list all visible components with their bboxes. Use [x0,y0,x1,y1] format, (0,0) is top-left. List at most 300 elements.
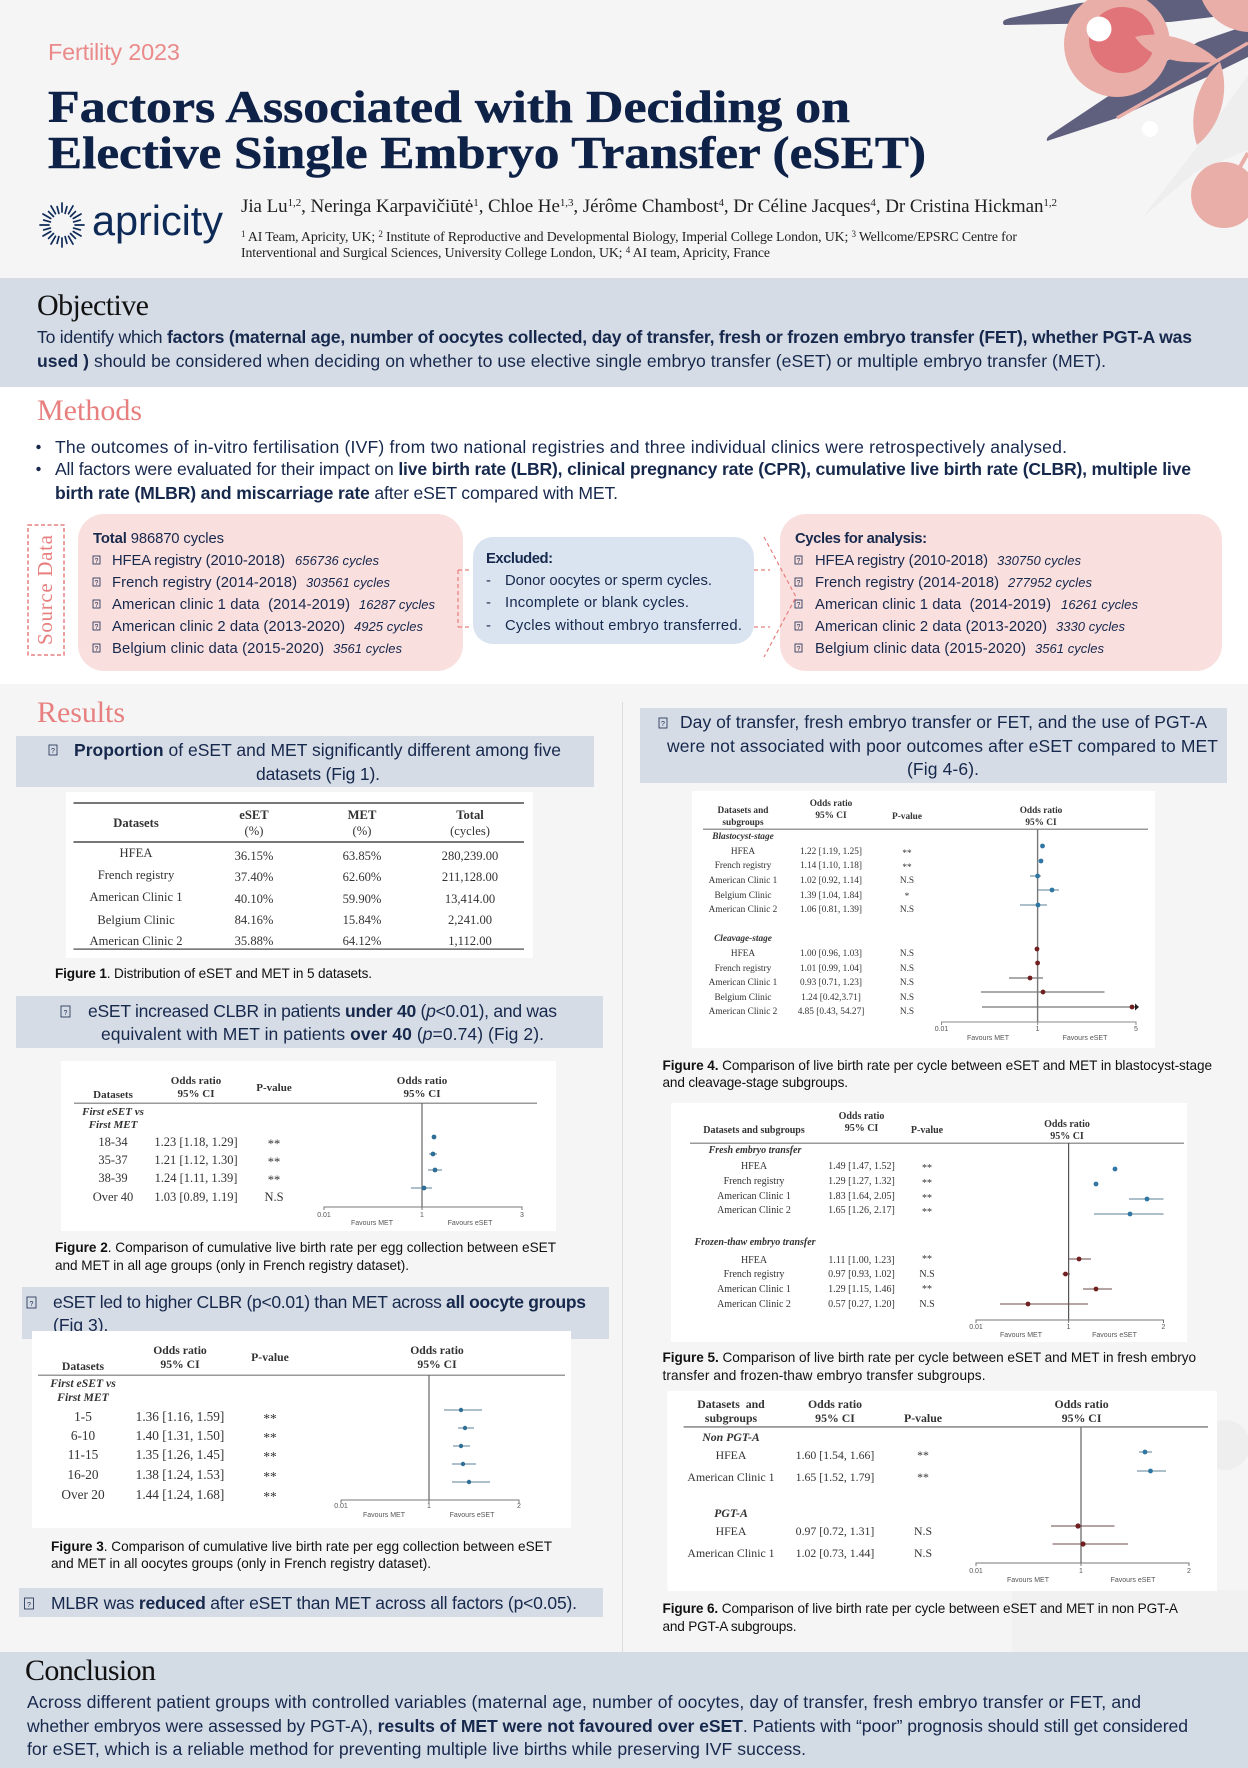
panel: methods [36,394,1191,503]
panel: cycles for analysis: ? [797,646,801,653]
figure 4 table: American Clinic 2 [709,1007,778,1017]
caption: figure 2 [55,1240,556,1273]
panel: cycles for analysis: ? [797,580,801,587]
connector: dashed bracket to excluded box [458,570,472,627]
panel: cycles for analysis: 330750 cycles [997,553,1082,568]
figure 6 chart: 0.01 [969,1568,983,1575]
figure 2 table: Datasets [93,1089,134,1101]
figure 3 table: 6-10 [71,1428,96,1443]
methods bullet list: The outcomes of in-vitro fertilisation (IVF) from two national registries and three individual clinics were retrospectively analysed. [55,437,1067,457]
caption: figure 5: transfer and frozen-thaw embryo transfer subgroups. [662,1368,986,1383]
key finding 4 [19,1588,603,1617]
figure 6 chart: 1 [1079,1568,1083,1575]
caption: figure 1: Figure 1. Distribution of eSET and MET in 5 datasets. [55,966,372,981]
figure 3 chart: 1 [427,1503,431,1510]
figure 5 table: 1.49 [1.47, 1.52] [828,1161,895,1172]
figure 4 table: 0.93 [0.71, 1.23] [800,978,862,988]
figure 1: distribution table: Belgium Clinic [97,913,175,927]
figure 3 table: 1.38 [1.24, 1.53] [136,1467,224,1482]
methods bullet list [36,437,1191,503]
figure 2 chart: 0.01 [317,1212,331,1219]
figure 2 table: N.S [264,1190,284,1204]
figure 4 table: Belgium Clinic [714,993,772,1003]
figure 1: distribution table: Datasets [113,816,159,830]
figure 6 table: 0.97 [0.72, 1.31] [796,1524,874,1538]
panel: total cycles: 656736 cycles [295,553,380,568]
figure 4 table: N.S [900,949,914,959]
figure 1: distribution table: 64.12% [343,934,382,948]
panel: excluded: - [486,618,491,634]
panel: excluded: Incomplete or blank cycles. [505,595,689,611]
key finding 5: were not associated with poor outcomes after eSET compared to MET [666,736,1218,756]
figure 6 table: 1.02 [0.73, 1.44] [796,1546,874,1560]
heading: methods: Methods [37,394,142,427]
figure 6 chart [969,1427,1191,1584]
key finding 1: ? [51,748,55,755]
source data label [28,525,64,655]
caption: figure 6 [662,1601,1179,1634]
figure 2 table: 1.03 [0.89, 1.19] [154,1190,238,1204]
figure 6 table: ** [917,1470,929,1484]
figure 2 table: First eSET vs [81,1106,144,1118]
figure 3 table: Datasets [62,1360,105,1373]
figure 4: forest plot by embryo stage [692,791,1155,1048]
caption: figure 2: and MET in all age groups (only in French registry dataset). [55,1258,409,1273]
figure 6 table: P-value [904,1411,942,1425]
figure 6 table: 95% CI [815,1411,855,1425]
figure 1: distribution table: American Clinic 1 [89,890,183,904]
figure 4 table: Odds ratio [1020,806,1063,816]
figure 1: distribution table: (cycles) [450,824,490,838]
figure 1: distribution table: 40.10% [235,892,274,906]
panel: excluded: Donor oocytes or sperm cycles. [505,573,712,589]
figure 4 table: P-value [892,812,922,822]
figure 6 table: Odds ratio [1055,1397,1109,1411]
figure 6 table: N.S [914,1524,932,1538]
caption: figure 3 [51,1539,552,1571]
caption: figure 5: Figure 5. Comparison of live birth rate per cycle between eSET and MET in fresh embryo [662,1350,1196,1365]
panel: cycles for analysis: 3561 cycles [1035,641,1104,656]
figure 1: distribution table: 35.88% [235,934,274,948]
panel: excluded [473,537,754,644]
figure 4 chart [935,829,1139,1042]
figure 3 table: 1.36 [1.16, 1.59] [136,1409,224,1424]
figure 4 table: ** [902,849,912,859]
figure 6 table: HFEA [716,1524,747,1538]
authors: , Chloe He [479,196,560,217]
panel: cycles for analysis: ? [797,602,801,609]
panel: cycles for analysis: 277952 cycles [1007,575,1092,590]
panel: cycles for analysis: ? [797,558,801,565]
figure 3 table: 1.40 [1.31, 1.50] [136,1428,224,1443]
figure 4 table: N.S [900,905,914,915]
figure 2 table: Odds ratio [397,1075,448,1087]
figure 5 chart: Favours MET [1000,1332,1043,1339]
figure 2 table: 95% CI [178,1088,214,1100]
key finding 5: (Fig 4-6). [907,759,979,779]
panel: total cycles [78,514,463,671]
figure 5 table: 1.83 [1.64, 2.05] [828,1191,895,1202]
figure 1: distribution table: 36.15% [235,849,274,863]
figure 6 chart: Favours MET [1007,1577,1050,1584]
objective text [37,327,1192,371]
figure 2 chart: 1 [420,1212,424,1219]
figure 3 chart: 2 [517,1503,521,1510]
key finding 3: (Fig 3). [53,1315,108,1335]
heading: results: Results [37,696,125,729]
figure 4 table: 1.01 [0.99, 1.04] [800,964,862,974]
panel: cycles for analysis: Cycles for analysis: [795,531,927,547]
figure 2 chart: Favours MET [351,1220,394,1227]
figure 5 table: 1.29 [1.15, 1.46] [828,1284,895,1295]
caption: figure 3: Figure 3. Comparison of cumulative live birth rate per egg collection between eSET [51,1539,552,1554]
figure 6 table: subgroups [705,1411,758,1425]
affiliations: 3 [851,229,856,239]
key finding 5: ? [661,721,665,728]
figure 5 table: N.S [919,1299,935,1310]
conclusion text [26,1692,1188,1759]
figure 3 table: 1.44 [1.24, 1.68] [136,1487,224,1502]
figure 5 table: Odds ratio [839,1111,884,1122]
figure 5 table: American Clinic 1 [717,1191,791,1202]
key finding 3: ? [30,1301,34,1308]
figure 4 table: 1.14 [1.10, 1.18] [800,861,862,871]
figure 5 table: ** [922,1207,932,1218]
key finding 2: eSET increased CLBR in patients under 40 (p<0.01), and was [88,1001,557,1021]
figure 4 table: American Clinic 1 [709,876,778,886]
figure 1: distribution table: 2,241.00 [448,913,492,927]
figure 5 table: ** [922,1163,932,1174]
figure 5 table: 0.97 [0.93, 1.02] [828,1269,895,1280]
panel: total cycles: HFEA registry (2010-2018) [112,553,285,569]
panel: excluded: - [486,573,491,589]
figure 4 table: N.S [900,978,914,988]
source data label: Source Data [33,534,57,645]
figure 6 table: 1.60 [1.54, 1.66] [796,1448,874,1462]
figure 4 chart: Favours MET [967,1035,1010,1042]
figure 2 table: ** [268,1173,280,1187]
figure 6: forest plot by PGT-A use [668,1391,1217,1591]
figure 4 table: 95% CI [815,811,847,821]
figure 4 chart: 5 [1134,1026,1138,1033]
key finding 2 [16,996,603,1048]
figure 5 table: 1.65 [1.26, 2.17] [828,1205,895,1216]
objective text: To identify which factors (maternal age, number of oocytes collected, day of transfer, fresh or frozen embryo transfer (FET), whether PGT-A was [37,327,1192,347]
figure 1: distribution table: 13,414.00 [445,892,495,906]
figure 5 table: American Clinic 2 [717,1299,791,1310]
affiliations: 2 [378,229,383,239]
figure 1: distribution table: eSET [239,808,269,822]
figure 2: forest plot by age [61,1061,556,1231]
figure 3 table: ** [263,1449,277,1464]
figure 3: forest plot by oocyte group [32,1331,571,1528]
affiliations: 4 [626,245,631,255]
authors: , Jérôme Chambost [573,196,719,217]
figure 6 table: Datasets and [697,1397,765,1411]
figure 2 table: Odds ratio [171,1075,222,1087]
panel: total cycles: 3561 cycles [333,641,402,656]
figure 3 table [49,1344,464,1504]
figure 4 table: American Clinic 1 [709,978,778,988]
authors: 1,2 [288,197,301,209]
conclusion text: Across different patient groups with controlled variables (maternal age, number of oocytes, day of transfer, fresh embryo transfer or FET, and [27,1692,1141,1712]
panel: total cycles: American clinic 1 data (2014-2019) [112,597,350,613]
methods bullet list: All factors were evaluated for their impact on live birth rate (LBR), clinical pregnancy rate (CPR), cumulative live birth rate (CLBR), multiple live [55,459,1191,479]
figure 3 table: 16-20 [67,1467,99,1482]
key finding 3 [22,1287,609,1339]
figure 1: distribution table: MET [348,808,377,822]
figure 3 table: 11-15 [68,1447,99,1462]
figure 3 table: 1.35 [1.26, 1.45] [136,1447,224,1462]
figure 2 table: 1.21 [1.12, 1.30] [154,1153,238,1167]
figure 5 table: 95% CI [1050,1131,1084,1142]
figure 5 table: Datasets and subgroups [703,1125,805,1136]
heading: conclusion: Conclusion [25,1654,156,1687]
key finding 1: Proportion of eSET and MET significantly different among five [74,740,561,760]
figure 6 chart: 2 [1187,1568,1191,1575]
figure 5 table: P-value [911,1125,944,1136]
figure 1: distribution table: 211,128.00 [442,870,498,884]
figure 3 table: 1-5 [74,1409,92,1424]
decorative botanical illustration [1003,0,1248,228]
figure 4 table: 1.24 [0.42,3.71] [801,993,861,1003]
figure 1: distribution table: 63.85% [343,849,382,863]
panel: total cycles: Belgium clinic data (2015-2020) [112,641,324,657]
key finding 2: equivalent with MET in patients over 40 (p=0.74) (Fig 2). [101,1024,544,1044]
figure 1: distribution table: American Clinic 2 [89,934,183,948]
panel: cycles for analysis: American clinic 2 data (2013-2020) [815,619,1047,635]
figure 3 chart: Favours MET [363,1512,406,1519]
figure 4 table: 1.06 [0.81, 1.39] [800,905,862,915]
figure 1: distribution table: 1,112.00 [448,934,492,948]
logo: apricity: apricity [92,197,223,244]
figure 6 table: HFEA [716,1448,747,1462]
authors: 4 [718,197,724,209]
authors: 4 [870,197,876,209]
figure 5 table: ** [922,1193,932,1204]
authors: , Dr Cristina Hickman [876,196,1044,217]
figure 3 table: ** [263,1469,277,1484]
figure 2 table: 1.23 [1.18, 1.29] [154,1135,238,1149]
figure 2 table: 35-37 [98,1153,128,1167]
figure 5 table: Fresh embryo transfer [708,1145,801,1156]
figure 1: distribution table: 37.40% [235,870,274,884]
figure 3 table: Over 20 [61,1487,105,1502]
panel: conclusion [0,1652,1248,1768]
figure 5 table: French registry [724,1269,784,1280]
affiliations: Interventional and Surgical Sciences, University College London, UK; [241,245,623,260]
authors: , Dr Céline Jacques [724,196,871,217]
figure 3 table: Odds ratio [410,1344,464,1357]
methods bullet list: birth rate (MLBR) and miscarriage rate after eSET compared with MET. [55,483,618,503]
authors: 1 [473,197,479,209]
figure 4 table: 1.39 [1.04, 1.84] [800,891,862,901]
figure 5 table: French registry [724,1176,784,1187]
panel: cycles for analysis: Belgium clinic data (2015-2020) [815,641,1026,657]
panel: total cycles: American clinic 2 data (2013-2020) [112,619,345,635]
figure 4 table: 1.00 [0.96, 1.03] [800,949,862,959]
figure 5 table: 1.29 [1.27, 1.32] [828,1176,895,1187]
figure 4 table: N.S [900,993,914,1003]
caption: figure 5 [662,1350,1196,1383]
figure 4 table: 1.02 [0.92, 1.14] [800,876,862,886]
figure 3 table: 95% CI [417,1358,457,1371]
figure 4 table: HFEA [731,949,755,959]
panel: objective [0,278,1248,387]
figure 5 table: N.S [919,1269,935,1280]
figure 5 table: American Clinic 2 [717,1205,791,1216]
figure 2 table [81,1075,448,1204]
figure 2 table: First MET [88,1119,139,1131]
figure 5 chart: 0.01 [969,1324,983,1331]
figure 4 chart: 0.01 [935,1026,948,1033]
figure 5: forest plot by fresh or frozen transfer [671,1103,1187,1342]
affiliations: AI team, Apricity, France [630,245,770,260]
figure 2 table: 18-34 [98,1135,128,1149]
figure 1: distribution table: Total [456,808,484,822]
figure 3 chart: Favours eSET [450,1512,495,1519]
figure 3 table: First MET [56,1391,110,1404]
figure 6 table: 95% CI [1062,1411,1102,1425]
figure 3 table: ** [263,1411,277,1426]
panel: total cycles: ? [95,602,99,609]
authors: 1,2 [1043,197,1057,209]
figure 4 table: Belgium Clinic [714,891,772,901]
affiliations [241,229,1017,260]
figure 1: distribution table: 84.16% [235,913,274,927]
figure 3 table: ** [263,1489,277,1504]
figure 5 table: Frozen-thaw embryo transfer [693,1237,816,1248]
figure 5 table: ** [922,1178,932,1189]
logo: apricity [40,197,223,247]
figure 1: distribution table: 15.84% [343,913,382,927]
panel: total cycles: French registry (2014-2018) [112,575,297,591]
authors: , Neringa Karpavičiūtė [301,196,473,217]
figure 6 table: American Clinic 1 [687,1546,775,1560]
figure 4 table: ** [902,863,912,873]
figure 4 table: Blastocyst-stage [711,832,774,842]
panel: cycles for analysis: ? [797,624,801,631]
figure 3 chart [334,1375,521,1519]
figure 3 table: First eSET vs [49,1377,116,1390]
panel: cycles for analysis [780,514,1222,671]
figure 5 table: HFEA [741,1255,768,1266]
figure 2 table: 95% CI [404,1088,440,1100]
figure 1: distribution table: 59.90% [343,892,382,906]
figure 2 table: 38-39 [98,1171,128,1185]
figure 6 table: American Clinic 1 [687,1470,775,1484]
panel: total cycles: 16287 cycles [359,597,436,612]
figure 6 table: 1.65 [1.52, 1.79] [796,1470,874,1484]
figure 5 chart: Favours eSET [1092,1332,1138,1339]
figure 3 table: 95% CI [160,1358,200,1371]
figure 2 table: 1.24 [1.11, 1.39] [155,1171,237,1185]
figure 6 chart: Favours eSET [1111,1577,1156,1584]
figure 6 table: Odds ratio [808,1397,862,1411]
figure 1: distribution table: (%) [245,824,263,838]
key finding 5: Day of transfer, fresh embryo transfer or FET, and the use of PGT-A [680,712,1207,732]
conclusion text: for eSET, which is a reliable method for preventing multiple live births while preserving IVF success. [27,1739,806,1759]
figure 5 table: 1.11 [1.00, 1.23] [828,1255,895,1266]
panel: total cycles: 4925 cycles [354,619,424,634]
heading: objective: Objective [37,289,149,322]
caption: figure 4: Figure 4. Comparison of live birth rate per cycle between eSET and MET in blastocyst-stage [662,1058,1212,1073]
figure 1: distribution table: 280,239.00 [442,849,498,863]
figure 3 table: Odds ratio [153,1344,207,1357]
figure 5 chart: 2 [1162,1324,1166,1331]
figure 4 table: French registry [715,964,772,974]
figure 2 chart [317,1103,524,1227]
panel: excluded: - [486,595,491,611]
figure 3 table: P-value [251,1351,289,1364]
figure 2 table: P-value [256,1082,292,1094]
figure 4 table: N.S [900,1007,914,1017]
figure 5 table: ** [922,1284,932,1295]
figure 4 table: N.S [900,876,914,886]
caption: figure 4 [662,1058,1212,1090]
caption: figure 6: Figure 6. Comparison of live birth rate per cycle between eSET and MET in non PGT-A [662,1601,1179,1616]
figure 2 table: ** [268,1137,280,1151]
affiliations: 1 [241,229,246,239]
figure 4 table: HFEA [731,847,755,857]
panel: total cycles: Total 986870 cycles [93,531,224,547]
figure 2 table: Over 40 [93,1190,133,1204]
figure 3 chart: 0.01 [334,1503,348,1510]
figure 4 table: 1.22 [1.19, 1.25] [800,847,862,857]
figure 1: distribution table: 62.60% [343,870,382,884]
affiliations: Wellcome/EPSRC Centre for [856,229,1017,244]
panel: total cycles: 303561 cycles [306,575,390,590]
figure 5 chart: 1 [1067,1324,1071,1331]
key finding 5 [640,708,1227,783]
key finding 4: ? [27,1602,31,1609]
figure 4 table [709,799,1063,1017]
figure 2 table: ** [268,1155,280,1169]
title [48,82,926,178]
figure 4 chart: 1 [1036,1026,1040,1033]
figure 4 chart: Favours eSET [1063,1035,1108,1042]
affiliations: Institute of Reproductive and Developmental Biology, Imperial College London, UK; [383,229,852,244]
figure 4 table: subgroups [722,818,764,828]
panel: cycles for analysis: 16261 cycles [1061,597,1138,612]
panel: cycles for analysis: French registry (2014-2018) [815,575,999,591]
figure 6 table [687,1397,1109,1560]
objective text: used ) should be considered when deciding on whether to use elective single embryo transfer (eSET) or multiple embryo transfer (MET). [37,351,1106,371]
figure 2 chart: Favours eSET [448,1220,493,1227]
figure 4 table: Odds ratio [810,799,853,809]
figure 4 table: American Clinic 2 [709,905,778,915]
figure 4 table: * [905,892,910,902]
figure 4 table: Datasets and [718,806,769,816]
caption: figure 3: and MET in all oocytes groups (only in French registry dataset). [51,1556,431,1571]
panel: total cycles: ? [95,580,99,587]
figure 4 table: French registry [715,861,772,871]
key finding 1 [16,736,594,787]
panel: total cycles: ? [95,558,99,565]
figure 6 table: PGT-A [714,1506,748,1520]
panel: cycles for analysis: American clinic 1 data (2014-2019) [815,597,1051,613]
conclusion text: whether embryos were assessed by PGT-A), results of MET were not favoured over eSET. Patients with “poor” prognosis should still get considered [26,1716,1188,1736]
caption: figure 4: and cleavage-stage subgroups. [662,1075,848,1090]
caption: figure 2: Figure 2. Comparison of cumulative live birth rate per egg collection between eSET [55,1240,556,1255]
affiliations: AI Team, Apricity, UK; [245,229,378,244]
figure 2 chart: 3 [520,1212,524,1219]
title: Factors Associated with Deciding on [48,82,850,132]
figure 5 table [693,1111,1090,1310]
figure 3 table: ** [263,1430,277,1445]
figure 6 table: N.S [914,1546,932,1560]
figure 1: distribution table: French registry [98,868,175,882]
